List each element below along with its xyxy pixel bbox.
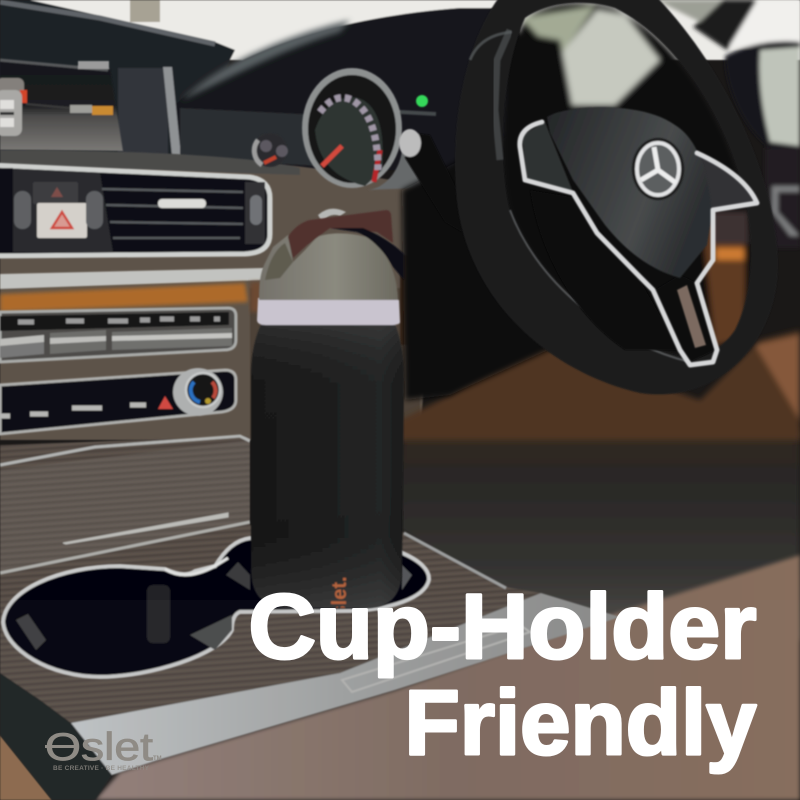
scene: dark column left of steering wheel [402,130,570,400]
silver console band [71,593,620,775]
wheel rim [455,0,778,394]
spoke panels [522,122,573,192]
maroon handle [288,210,393,258]
steering column stalk [399,129,468,232]
scene: cup holders [3,538,429,677]
rim highlights [510,210,690,362]
steering wheel [455,0,778,394]
dark console edge [0,673,112,800]
scene: window and door mirror [656,0,800,248]
scene: brown carpet and door trim [400,330,800,440]
logo bar [45,745,74,748]
scene: dash surface and wood panel [0,150,440,440]
bottle logo text: Oslet. [329,576,351,632]
view through the wheel [503,3,751,358]
black strap [330,228,404,280]
scene: wood console tray [0,436,620,800]
scene: silver trim and ambient orange light [0,268,264,312]
scene: climate strip with dial [0,368,236,434]
scene: infotainment screen [0,60,123,151]
scene: tan passenger seat [0,555,800,800]
Mercedes star logo [632,138,684,200]
scene: air vent with silver trim [0,165,270,256]
bottle lid dome [259,233,398,300]
lid spout opening [265,243,293,280]
headline line 2: Friendly [404,672,756,774]
scene: footwell and floor [400,425,800,640]
airbag hub [547,107,712,278]
headline [248,576,756,774]
scene: windshield and dashboard top [0,0,800,170]
logo tagline: BE CREATIVE · BE HEALTHY [53,765,150,772]
scene: lower grey haze [0,600,800,800]
bottle collar band [257,298,400,325]
bottle body [251,322,404,608]
logo trademark: TM [153,756,162,762]
logo wordmark: Oslet [45,726,153,769]
scene: instrument cluster gauge [253,68,440,222]
product: insulated bottle [251,210,404,632]
scene: control button strip [0,308,236,362]
silver spokes [520,122,757,365]
brand logo [45,726,162,772]
headline line 1: Cup-Holder [248,576,756,678]
